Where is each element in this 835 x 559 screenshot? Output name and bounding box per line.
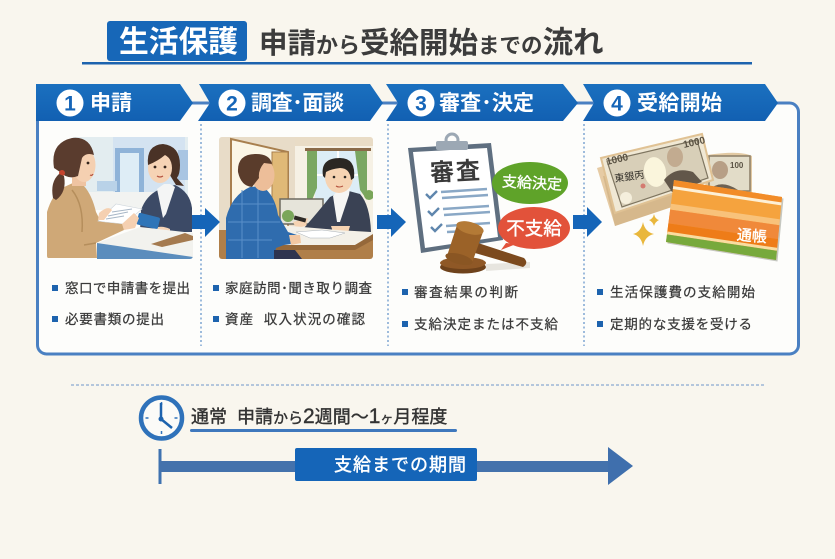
duration text: 申請 [237,407,273,427]
desk [287,226,348,234]
illustration: review clipboard and gavel: 審査 [429,158,481,187]
document [98,204,142,224]
step 4 header [583,84,778,121]
step 3 bullets: 支給決定または不支給 [414,317,558,332]
badge: 不支給 [498,207,570,250]
title text: から受給開始までの流れ [316,26,604,60]
step 3 bullets: 審査結果の判断 [414,285,518,300]
badge: 支給決定: 支給決定 [502,174,562,194]
step 4 bullets: 生活保護費の支給開始 [610,285,756,300]
step 1 bullets [52,281,190,327]
step 4 bullets [597,285,756,332]
duration underline [190,429,457,432]
step 2 bullets: 資産 収入状況の確認 [225,312,366,327]
sparkles [633,222,654,246]
applicant [47,182,124,258]
illustration: application at the counter [47,137,193,259]
timeline label [295,448,477,481]
timeline arrow [158,447,633,485]
illustration: home visit interview [219,137,374,259]
timeline label: 支給までの期間 [334,455,466,475]
illustration: banknotes and passbook: 1000 [682,135,707,151]
arrow: step 2 to 3 [377,208,406,237]
client [226,186,300,259]
step 1 bullets: 必要書類の提出 [65,312,164,327]
step 2 header: 調査･面談 [251,92,344,115]
step 2 header [198,84,383,121]
step 4 header: 4 [611,92,623,116]
step 1 bullets: 窓口で申請書を提出 [65,281,190,296]
panel frame [38,103,798,354]
illustration: banknotes and passbook: 100 [730,161,744,170]
illustration: banknotes and passbook: 1000 [605,152,630,168]
clerk [140,185,192,232]
step 2 bullets [213,280,372,327]
gavel [440,219,530,274]
arrow: step 1 to 2 [192,208,220,237]
step 3 header [386,84,578,121]
illustration: banknotes and passbook: 東銀丙 [614,168,645,185]
title underline [82,62,752,64]
step 3 bullets [402,285,558,332]
title text: 申請 [259,28,316,60]
panel: process steps [36,84,798,354]
step 4 bullets: 定期的な支援を受ける [610,317,752,332]
title [82,21,752,64]
arrow: step 3 to 4 [573,207,602,237]
illustration: review clipboard and gavel [408,134,570,274]
step 1 header: 1 [64,92,76,116]
step 3 header: 審査･決定 [439,92,534,115]
badge: 不支給: 不支給 [506,218,562,239]
interviewer [304,190,371,232]
duration text: 通常 [191,407,227,427]
duration text: から2週間～1ヶ月程度 [273,405,447,428]
icon: clock [141,398,182,438]
passbook: 通帳 [736,227,767,246]
title badge: 生活保護 [119,26,238,59]
step 1 header: 申請 [90,92,132,115]
step 4 header: 受給開始 [637,92,722,115]
illustration: banknotes and passbook [597,134,785,265]
counter [97,227,193,257]
badge: 支給決定 [492,162,568,204]
step 2 bullets: 家庭訪問･聞き取り調査 [225,280,372,296]
timeline section [141,398,633,485]
step 2 header: 2 [226,92,238,116]
passbook [666,180,784,262]
step 1 header [36,84,193,121]
step 3 header: 3 [415,92,427,116]
